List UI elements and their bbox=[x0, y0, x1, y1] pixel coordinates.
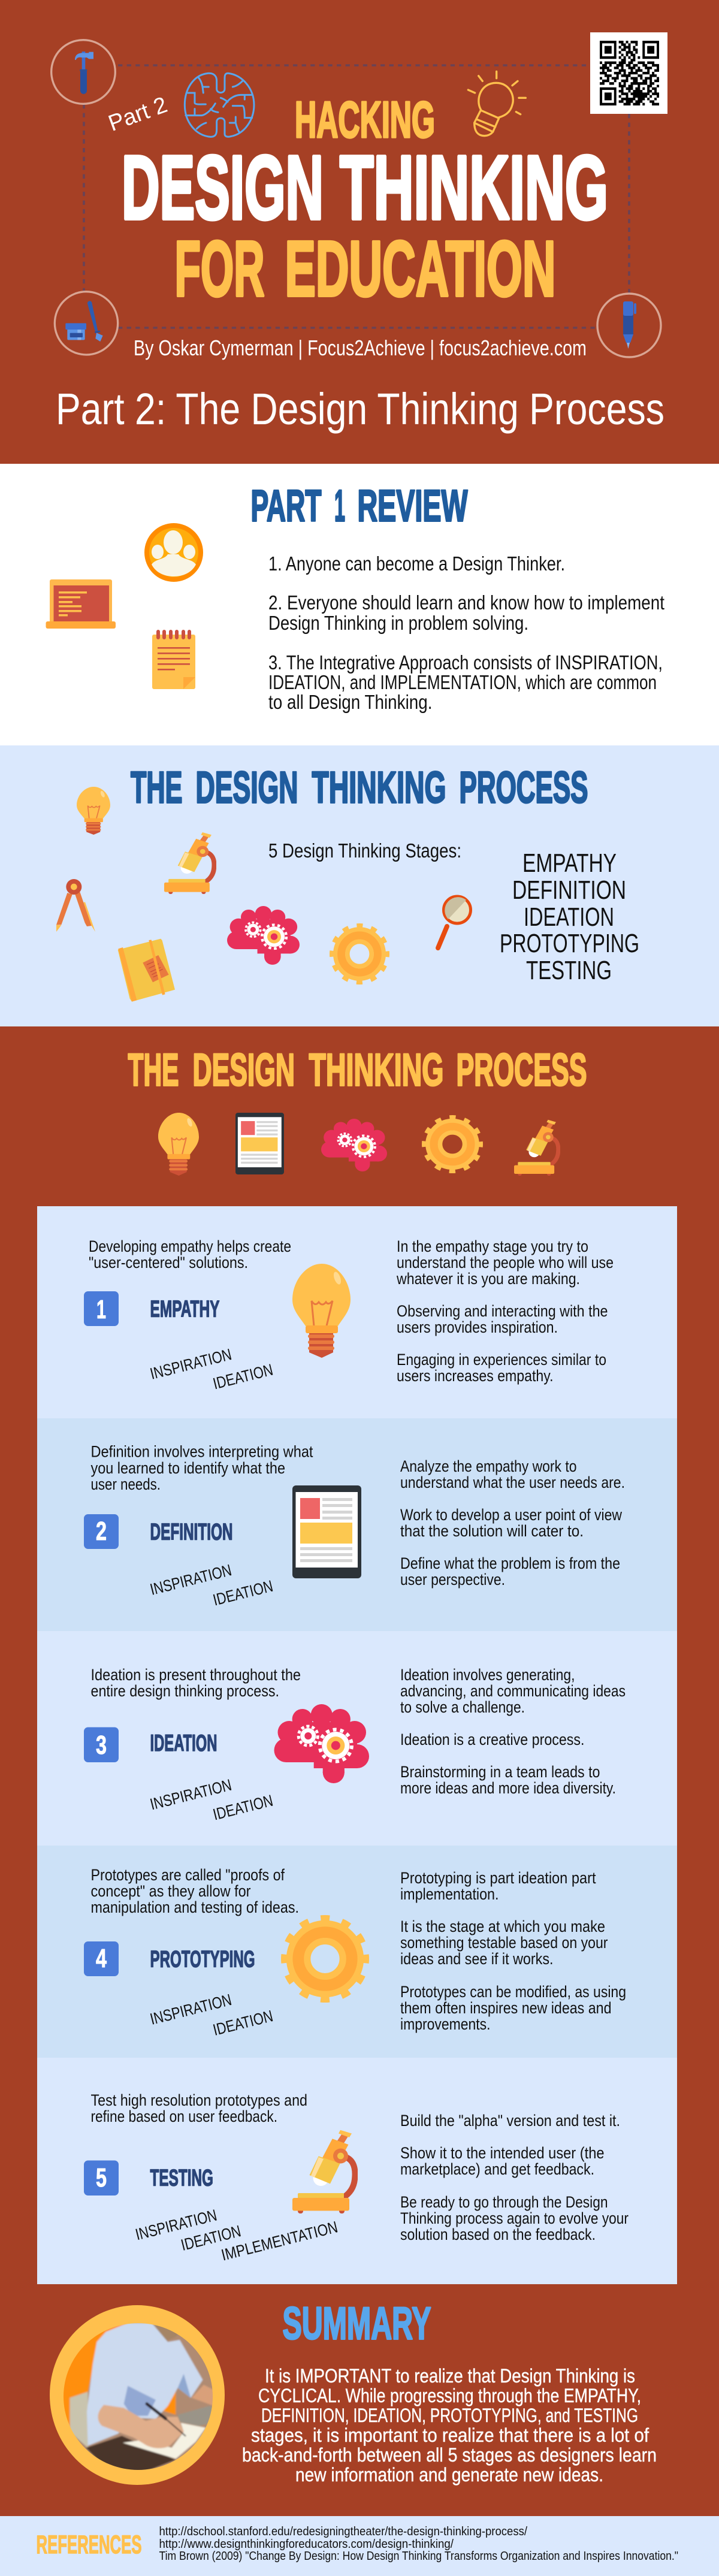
text: definition summary: you learned to identify what the bbox=[91, 1459, 285, 1477]
text: prototyping detail bbox=[400, 1869, 626, 2033]
list: stages: TESTING bbox=[526, 956, 612, 985]
icon: brain outline bbox=[185, 73, 254, 137]
label: empathy: EMPATHY bbox=[150, 1297, 219, 1322]
dashed frame bbox=[84, 65, 629, 328]
panel: part 1 review bbox=[0, 464, 719, 745]
text: empathy summary: "user-centered" solutions. bbox=[89, 1254, 248, 1272]
icon: lightbulb outline bbox=[468, 71, 525, 136]
text: ideation detail: Ideation is a creative process. bbox=[400, 1731, 585, 1748]
tags bbox=[148, 1776, 275, 1823]
icon: notepad bbox=[152, 630, 195, 689]
label: definition: DEFINITION bbox=[150, 1520, 232, 1545]
text: prototyping summary: Prototypes are called "proofs of bbox=[91, 1866, 285, 1884]
icon: qr code bbox=[590, 32, 667, 114]
list: stages: DEFINITION bbox=[512, 875, 626, 905]
text: prototyping summary: manipulation and testing of ideas. bbox=[91, 1898, 299, 1916]
heading: process: THINKING bbox=[312, 762, 446, 813]
text: prototyping detail: something testable based on your bbox=[400, 1934, 608, 1952]
text: ideation detail: advancing, and communicating ideas bbox=[400, 1682, 626, 1700]
panel: header bbox=[52, 32, 667, 434]
text: empathy summary: Developing empathy helps create bbox=[89, 1237, 291, 1255]
text: review points bbox=[268, 552, 664, 713]
icon: magnifier bbox=[438, 896, 471, 948]
icon: gear bbox=[285, 1919, 365, 1999]
text: ideation detail bbox=[400, 1666, 626, 1797]
badge 3: 3 bbox=[96, 1731, 107, 1760]
text: testing detail: marketplace) and get feedback. bbox=[400, 2160, 594, 2178]
tags bbox=[148, 1561, 275, 1609]
heading: process yellow bbox=[128, 1045, 587, 1095]
text: prototyping summary bbox=[91, 1866, 299, 1916]
heading: process yellow: DESIGN bbox=[193, 1045, 295, 1095]
panel: process detail heading bbox=[128, 1045, 587, 1176]
icon: tablet bbox=[292, 1485, 361, 1578]
label: testing: TESTING bbox=[150, 2166, 213, 2191]
heading: for education: FOR bbox=[175, 224, 265, 313]
heading: process: DESIGN bbox=[195, 762, 298, 813]
tags: INSPIRATION bbox=[134, 2206, 219, 2243]
text: ideation summary bbox=[91, 1666, 301, 1700]
tags: IDEATION bbox=[211, 1577, 275, 1609]
heading: hacking: HACKING bbox=[295, 92, 435, 149]
text: prototyping detail: Prototyping is part ideation part bbox=[400, 1869, 596, 1887]
icon: microscope bbox=[292, 2130, 355, 2213]
heading: references: REFERENCES bbox=[36, 2530, 141, 2559]
text: definition summary: user needs. bbox=[91, 1475, 161, 1493]
text: ideation detail: more ideas and more idea diversity. bbox=[400, 1779, 616, 1797]
text: empathy detail: Observing and interacting with the bbox=[397, 1302, 608, 1320]
label: ideation: IDEATION bbox=[150, 1731, 217, 1756]
panel: stage 3 ideation bbox=[37, 1631, 677, 1846]
text: testing detail: Show it to the intended user (the bbox=[400, 2144, 604, 2162]
text: testing detail bbox=[400, 2112, 629, 2243]
icon: brain with gears bbox=[227, 906, 300, 965]
heading: part 1 review: REVIEW bbox=[357, 481, 468, 531]
badge 5: 5 bbox=[96, 2163, 107, 2193]
icon: compass bbox=[56, 879, 95, 932]
tags: INSPIRATION bbox=[148, 1561, 234, 1599]
text: ideation summary: entire design thinking process. bbox=[91, 1682, 279, 1700]
tags: IDEATION bbox=[211, 2007, 275, 2039]
text: definition detail: user perspective. bbox=[400, 1571, 505, 1589]
text: empathy summary bbox=[89, 1237, 291, 1272]
icon: laptop bbox=[46, 579, 116, 629]
text: review points: Design Thinking in problem solving. bbox=[268, 612, 528, 634]
text: ideation detail: to solve a challenge. bbox=[400, 1698, 525, 1716]
text: empathy detail: whatever it is you are making. bbox=[396, 1270, 580, 1288]
list: stages: IDEATION bbox=[524, 902, 614, 932]
photo: person writing in ring bbox=[50, 2305, 225, 2485]
icon: gear bbox=[332, 926, 387, 982]
text: definition detail: that the solution will cater to. bbox=[400, 1522, 584, 1540]
text: ideation detail: Brainstorming in a team leads to bbox=[400, 1763, 600, 1781]
icon row bbox=[158, 1113, 558, 1176]
heading: part 1 review: 1 bbox=[334, 481, 345, 531]
icon: microscope bbox=[164, 832, 214, 894]
heading: process: PROCESS bbox=[459, 762, 588, 813]
text: empathy detail: In the empathy stage you try to bbox=[397, 1237, 588, 1255]
icon: ink and fountain pen bbox=[55, 292, 118, 355]
panel: the design thinking process intro bbox=[0, 745, 719, 1026]
badge 1 bbox=[84, 1291, 119, 1326]
label: part 2: Part 2 bbox=[105, 92, 171, 137]
text: prototyping detail: It is the stage at which you make bbox=[400, 1917, 605, 1935]
tags bbox=[148, 1345, 275, 1393]
list: stages: EMPATHY bbox=[522, 848, 617, 878]
tags: INSPIRATION bbox=[148, 1991, 234, 2028]
text: empathy detail: users provides inspiration. bbox=[397, 1318, 558, 1336]
heading: design thinking: DESIGN bbox=[122, 137, 324, 238]
text: review points: 1. Anyone can become a Design Thinker. bbox=[268, 552, 565, 575]
text: definition detail: Analyze the empathy work to bbox=[400, 1457, 576, 1475]
text: empathy detail: understand the people who will use bbox=[397, 1254, 614, 1272]
tags: IDEATION bbox=[211, 1361, 275, 1393]
heading: summary: SUMMARY bbox=[283, 2299, 431, 2349]
panel: stage 5 testing bbox=[37, 2058, 677, 2284]
panel: summary bbox=[50, 2299, 657, 2486]
badge 4: 4 bbox=[96, 1944, 107, 1973]
tags bbox=[134, 2206, 340, 2264]
panel: stage 1 empathy bbox=[37, 1206, 677, 1418]
heading: process yellow: PROCESS bbox=[457, 1045, 587, 1095]
heading: process yellow: THE bbox=[128, 1045, 179, 1095]
tags: INSPIRATION bbox=[148, 1345, 234, 1383]
text: summary body: new information and generate new ideas. bbox=[295, 2464, 603, 2486]
badge 2 bbox=[84, 1514, 119, 1549]
text: definition detail: Define what the problem is from the bbox=[400, 1554, 620, 1572]
text: ideation detail: Ideation involves generating, bbox=[400, 1666, 575, 1684]
text: summary body: stages, it is important to realize that there is a lot of bbox=[251, 2424, 649, 2446]
text: empathy detail: users increases empathy. bbox=[397, 1367, 554, 1385]
tags: IDEATION bbox=[179, 2222, 243, 2254]
badge 3 bbox=[84, 1727, 119, 1762]
panel: stage 2 definition bbox=[37, 1418, 677, 1631]
icon: hammer bbox=[52, 40, 115, 104]
text: testing summary: refine based on user feedback. bbox=[91, 2107, 277, 2125]
list: stages bbox=[500, 848, 639, 985]
text: prototyping summary: concept" as they allow for bbox=[91, 1882, 251, 1900]
byline: By Oskar Cymerman | Focus2Achieve | focus2achieve.com bbox=[134, 336, 587, 360]
text: summary body bbox=[242, 2365, 657, 2486]
text: empathy detail: Engaging in experiences similar to bbox=[397, 1351, 606, 1369]
text: ideation summary: Ideation is present throughout the bbox=[91, 1666, 301, 1684]
text: testing summary bbox=[91, 2091, 307, 2125]
label: prototyping: PROTOTYPING bbox=[150, 1946, 255, 1973]
text: reference list: http://www.designthinkingforeducators.com/design-thinking/ bbox=[159, 2538, 454, 2551]
text: definition detail bbox=[400, 1457, 625, 1589]
tags: IDEATION bbox=[211, 1792, 275, 1823]
panel: references bbox=[0, 2516, 719, 2576]
badge 5 bbox=[84, 2161, 119, 2196]
text: prototyping detail: Prototypes can be modified, as using bbox=[400, 1983, 626, 2001]
tags bbox=[148, 1991, 275, 2039]
heading: process bbox=[131, 762, 588, 813]
text: testing detail: solution based on the feedback. bbox=[400, 2225, 596, 2243]
heading: part 1 review bbox=[250, 481, 468, 531]
text: prototyping detail: improvements. bbox=[400, 2015, 490, 2033]
icon: bulb bbox=[292, 1264, 351, 1358]
heading: for education bbox=[175, 224, 556, 313]
tags: INSPIRATION bbox=[148, 1776, 234, 1813]
icon: bulb bbox=[77, 787, 110, 835]
badge 4 bbox=[84, 1941, 119, 1976]
text: prototyping detail: them often inspires new ideas and bbox=[400, 1999, 611, 2017]
icon: marker pen bbox=[597, 294, 661, 357]
text: reference list bbox=[159, 2525, 678, 2563]
text: definition summary bbox=[91, 1443, 313, 1493]
text: summary body: CYCLICAL. While progressing through the EMPATHY, bbox=[258, 2385, 641, 2406]
text: testing detail: Be ready to go through the Design bbox=[400, 2193, 608, 2211]
list: stages: PROTOTYPING bbox=[500, 929, 639, 958]
text: testing summary: Test high resolution prototypes and bbox=[91, 2091, 307, 2109]
heading: part 1 review: PART bbox=[250, 481, 321, 531]
heading: process yellow: THINKING bbox=[309, 1045, 443, 1095]
badge 1: 1 bbox=[96, 1295, 106, 1324]
text: summary body: It is IMPORTANT to realize that Design Thinking is bbox=[265, 2365, 635, 2387]
text: definition detail: Work to develop a user point of view bbox=[400, 1506, 622, 1524]
badge 2: 2 bbox=[96, 1517, 107, 1546]
text: definition detail: understand what the user needs are. bbox=[400, 1473, 625, 1491]
text: prototyping detail: implementation. bbox=[400, 1885, 499, 1903]
text: reference list: http://dschool.stanford.edu/redesigningtheater/the-design-thinking-process/ bbox=[159, 2525, 527, 2538]
text: definition summary: Definition involves interpreting what bbox=[91, 1443, 313, 1461]
text: testing detail: Thinking process again to evolve your bbox=[400, 2209, 629, 2227]
heading: process: THE bbox=[131, 762, 182, 813]
tags: IMPLEMENTATION bbox=[219, 2218, 340, 2264]
text: empathy detail bbox=[396, 1237, 614, 1385]
text: summary body: back-and-forth between all 5 stages as designers learn bbox=[242, 2444, 657, 2466]
text: prototyping detail: ideas and see if it works. bbox=[400, 1950, 554, 1968]
icon: brain with gears bbox=[274, 1704, 369, 1783]
text: testing detail: Build the "alpha" version and test it. bbox=[400, 2112, 620, 2130]
text: review points: to all Design Thinking. bbox=[268, 691, 433, 713]
icon: book bbox=[118, 939, 175, 1002]
icon: people bbox=[144, 523, 203, 582]
text: stages caption: 5 Design Thinking Stages: bbox=[268, 839, 461, 862]
panel: stage 4 prototyping bbox=[37, 1846, 677, 2058]
